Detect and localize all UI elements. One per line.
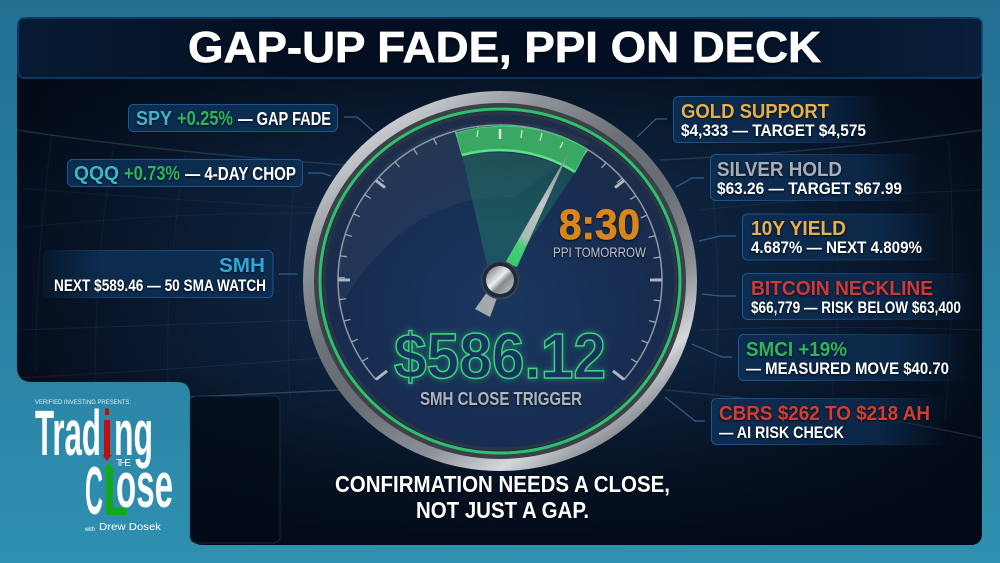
takeaway text: NOT JUST A GAP.: [416, 497, 589, 523]
callout: CBRS: — AI RISK CHECK: [719, 423, 845, 442]
callout: QQQ: +0.73%: [124, 163, 180, 185]
logo: Trading the Close: [0, 382, 190, 563]
gauge: [303, 91, 697, 471]
logo: Trading the Close: C: [85, 453, 103, 529]
callout: CBRS: [712, 398, 946, 444]
callout: CBRS: CBRS $262 TO $218 AH: [719, 403, 930, 425]
callout: SMH: [43, 250, 273, 298]
callout: SMCI: — MEASURED MOVE $40.70: [746, 359, 949, 378]
callout: SMH: SMH: [219, 255, 265, 277]
callout: SPY: SPY: [136, 108, 173, 130]
callout: bitcoin: BITCOIN NECKLINE: [751, 278, 933, 300]
price: $586.12: [394, 320, 606, 392]
logo: Trading the Close: VERIFIED INVESTING PRESENTS:: [35, 399, 131, 406]
callout: 10Y yield: 4.687% — NEXT 4.809%: [751, 238, 922, 257]
price glow: $586.12: [394, 320, 606, 392]
callout: silver: [710, 154, 920, 200]
callout: QQQ: — 4-DAY CHOP: [185, 164, 296, 184]
dial highlight: [338, 122, 590, 310]
needle tail: [475, 292, 497, 317]
takeaway text: CONFIRMATION NEEDS A CLOSE,: [335, 471, 670, 497]
logo: Trading the Close: with: [84, 527, 95, 533]
logo: Trading the Close: Drew Dosek: [99, 521, 162, 533]
callout: QQQ: QQQ: [74, 163, 119, 185]
PPI tomorrow label: PPI TOMORROW: [553, 244, 647, 260]
callout: QQQ: [68, 160, 302, 186]
hub: [482, 262, 518, 298]
logo: Trading the Close: ose: [116, 449, 173, 521]
callout: 10Y yield: [742, 214, 942, 260]
callout: silver: $63.26 — TARGET $67.99: [717, 179, 902, 198]
title: GAP-UP FADE, PPI ON DECK: [188, 23, 821, 72]
green target band: [456, 126, 587, 172]
needle: [505, 150, 570, 267]
callout: SMCI: SMCI +19%: [746, 339, 847, 361]
callout: SPY: [128, 104, 338, 132]
takeaway text: [335, 471, 670, 523]
metal bezel: [303, 91, 697, 471]
callout: bitcoin: [742, 274, 978, 320]
callout: 10Y yield: 10Y YIELD: [751, 218, 846, 240]
logo: Trading the Close: THE: [116, 458, 131, 469]
logo: Trading the Close: ng: [114, 397, 153, 469]
callout: SPY: +0.25%: [177, 108, 233, 130]
callout: silver: SILVER HOLD: [717, 159, 842, 181]
leader lines: [279, 117, 736, 421]
callout: gold: $4,333 — TARGET $4,575: [681, 121, 866, 140]
callout: SMH: NEXT $589.46 — 50 SMA WATCH: [54, 276, 266, 295]
logo: Trading the Close: L: [105, 455, 128, 529]
price caption: SMH CLOSE TRIGGER: [420, 389, 582, 409]
callout: SMCI: [738, 334, 968, 380]
header banner: [18, 18, 982, 78]
callout: gold: [674, 96, 884, 142]
tick scale: [338, 125, 662, 380]
callout: gold: GOLD SUPPORT: [681, 101, 829, 123]
callout: SPY: — GAP FADE: [238, 109, 331, 129]
logo: Trading the Close: i: [103, 397, 111, 469]
logo: Trading the Close: Trad: [35, 397, 101, 469]
green wedge: [462, 152, 575, 268]
8:30 time: 8:30: [559, 201, 640, 249]
green ring: [320, 109, 680, 453]
